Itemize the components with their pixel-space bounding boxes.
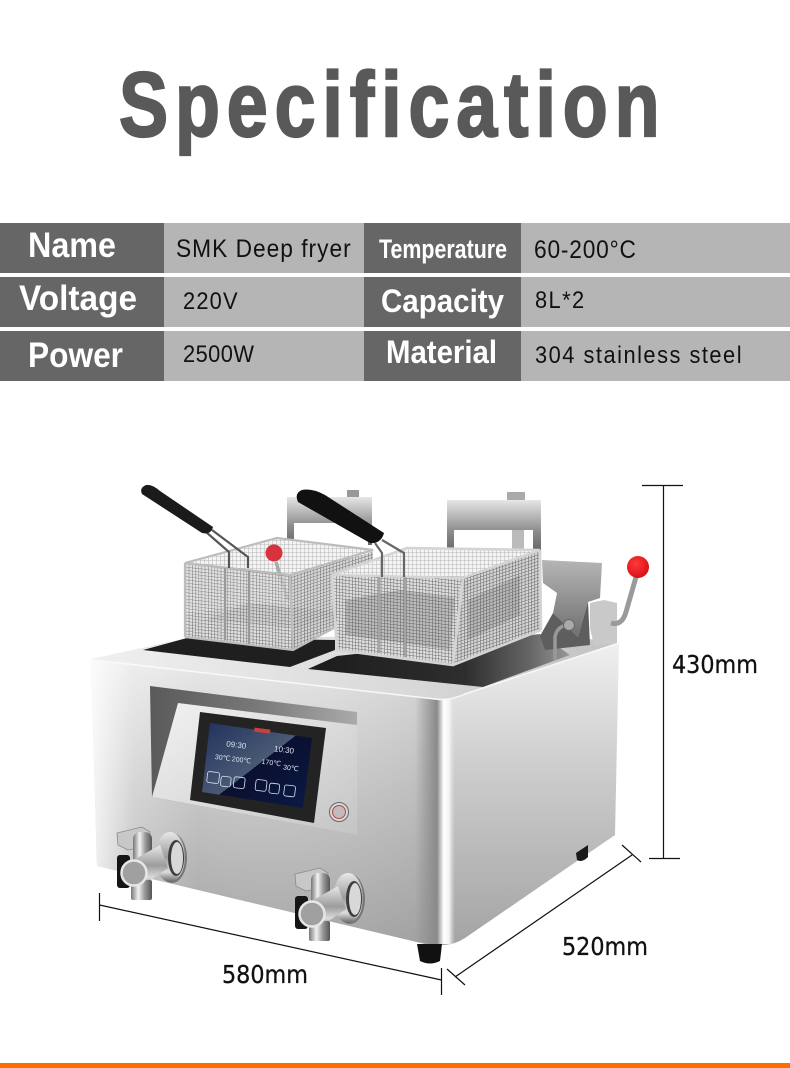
right basket handle (297, 490, 404, 577)
row: name and temperature: SMK Deep fryer (176, 235, 351, 263)
top edge line (91, 643, 619, 699)
row: voltage and capacity (0, 277, 790, 327)
power button (330, 802, 348, 822)
side funnel and lift mechanism (540, 556, 649, 660)
row: voltage and capacity: Capacity (381, 283, 504, 319)
row: voltage and capacity: 8L*2 (535, 286, 584, 313)
row: power and material: 304 stainless steel (535, 341, 742, 368)
dimension: depth 520mm: 520mm (562, 932, 648, 961)
row: power and material (0, 331, 790, 381)
row: power and material: Power (28, 336, 123, 375)
screen readouts: 30℃ (214, 754, 231, 763)
title: Specification (119, 53, 666, 156)
row: voltage and capacity: Voltage (19, 279, 137, 318)
left fry basket (185, 538, 373, 650)
row: name and temperature (0, 223, 790, 273)
screen readouts: 170℃ (261, 759, 282, 768)
touch screen (190, 712, 326, 823)
right oil tank (308, 634, 570, 687)
screen readouts: 200℃ (231, 756, 252, 765)
dimension: width 580mm: 580mm (222, 960, 308, 989)
fryer top surface (91, 635, 619, 699)
side panel of fryer body (445, 643, 619, 945)
left basket handle (141, 485, 248, 568)
row: power and material: 2500W (183, 340, 254, 367)
feet (417, 845, 588, 964)
rounded corner highlight (415, 697, 455, 944)
row: name and temperature: Name (28, 226, 116, 265)
row: power and material: Material (386, 334, 497, 370)
left oil tank (143, 638, 335, 667)
right drain tap (295, 868, 365, 941)
screen readouts: 30℃ (283, 764, 299, 773)
row: name and temperature: Temperature (379, 234, 507, 264)
left drain tap (117, 827, 187, 900)
right fry basket (332, 548, 541, 665)
red knob inside basket (266, 544, 288, 600)
control panel recess (150, 686, 357, 835)
row: name and temperature: 60-200°C (534, 236, 636, 264)
front panel of fryer body (91, 660, 445, 945)
screen readouts: 10:30 (274, 744, 295, 756)
screen readouts: 09:30 (226, 739, 247, 751)
dimension: width 580mm (100, 893, 442, 995)
rear lift brackets (287, 490, 541, 552)
specification table (0, 223, 790, 381)
orange footer bar (0, 1063, 790, 1068)
deep fryer illustration (91, 485, 649, 964)
dimension: height 430mm: 430mm (672, 650, 758, 679)
row: voltage and capacity: 220V (183, 287, 238, 314)
dimension: depth 520mm (447, 845, 648, 985)
dimension: height 430mm (642, 485, 758, 858)
screen readouts (206, 723, 303, 797)
